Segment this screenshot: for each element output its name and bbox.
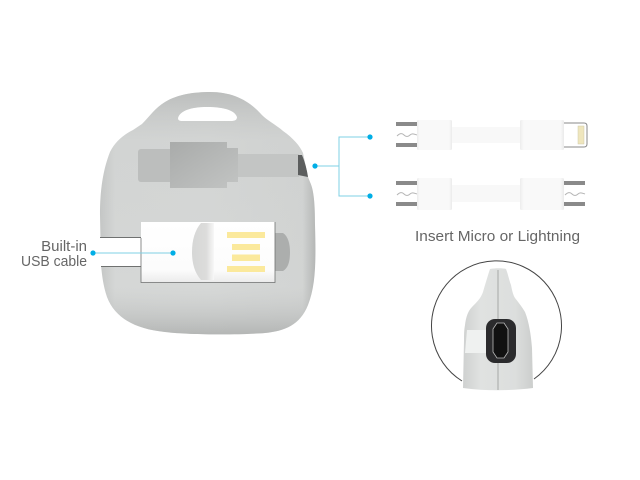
device outline with handle <box>100 92 315 334</box>
callout: bracket to adapters <box>312 134 373 199</box>
plug white housing <box>141 222 275 282</box>
adapter: micro to micro <box>396 178 585 210</box>
right head <box>520 120 564 150</box>
slot connector recess <box>170 142 238 188</box>
label: built-in USB cable <box>21 238 87 270</box>
lightning plug <box>564 123 587 147</box>
caption: insert micro or lightning: Insert Micro or Lightning <box>415 228 580 245</box>
plug shadow edge <box>141 222 275 282</box>
adapter: micro to lightning <box>396 120 587 150</box>
inset: port close-up <box>431 261 561 390</box>
cable storage slot <box>138 142 308 188</box>
label: built-in USB cable: Built-in <box>41 238 87 255</box>
built-in USB cable stub <box>96 238 146 266</box>
contact 3 <box>232 254 260 261</box>
device vertical shading <box>100 92 315 334</box>
left micro plug <box>396 181 417 206</box>
right tab recess <box>275 233 290 271</box>
seam line <box>497 270 499 390</box>
plug grey tongue <box>192 223 214 280</box>
right micro plug <box>564 181 585 206</box>
left head <box>417 178 452 210</box>
label: built-in USB cable: USB cable <box>21 253 87 270</box>
contact 4 <box>227 266 265 272</box>
window recess <box>465 330 488 353</box>
contact 2 <box>232 244 260 250</box>
device: grey key-fob body <box>96 92 315 334</box>
left head <box>417 120 452 150</box>
callout: USB cable leader line <box>90 250 176 256</box>
flat cable <box>452 127 520 143</box>
USB plug <box>141 222 275 282</box>
slot cable channel <box>238 154 299 177</box>
side opening <box>298 155 308 177</box>
contact 1 <box>227 232 265 238</box>
inset circle arc <box>431 261 561 381</box>
cable shadow lines <box>100 238 141 266</box>
close-up device tip <box>463 268 533 390</box>
slot left recess <box>138 149 178 182</box>
micro plug <box>396 122 417 147</box>
right head <box>520 178 564 210</box>
micro port <box>486 319 516 363</box>
flat cable <box>452 185 520 202</box>
